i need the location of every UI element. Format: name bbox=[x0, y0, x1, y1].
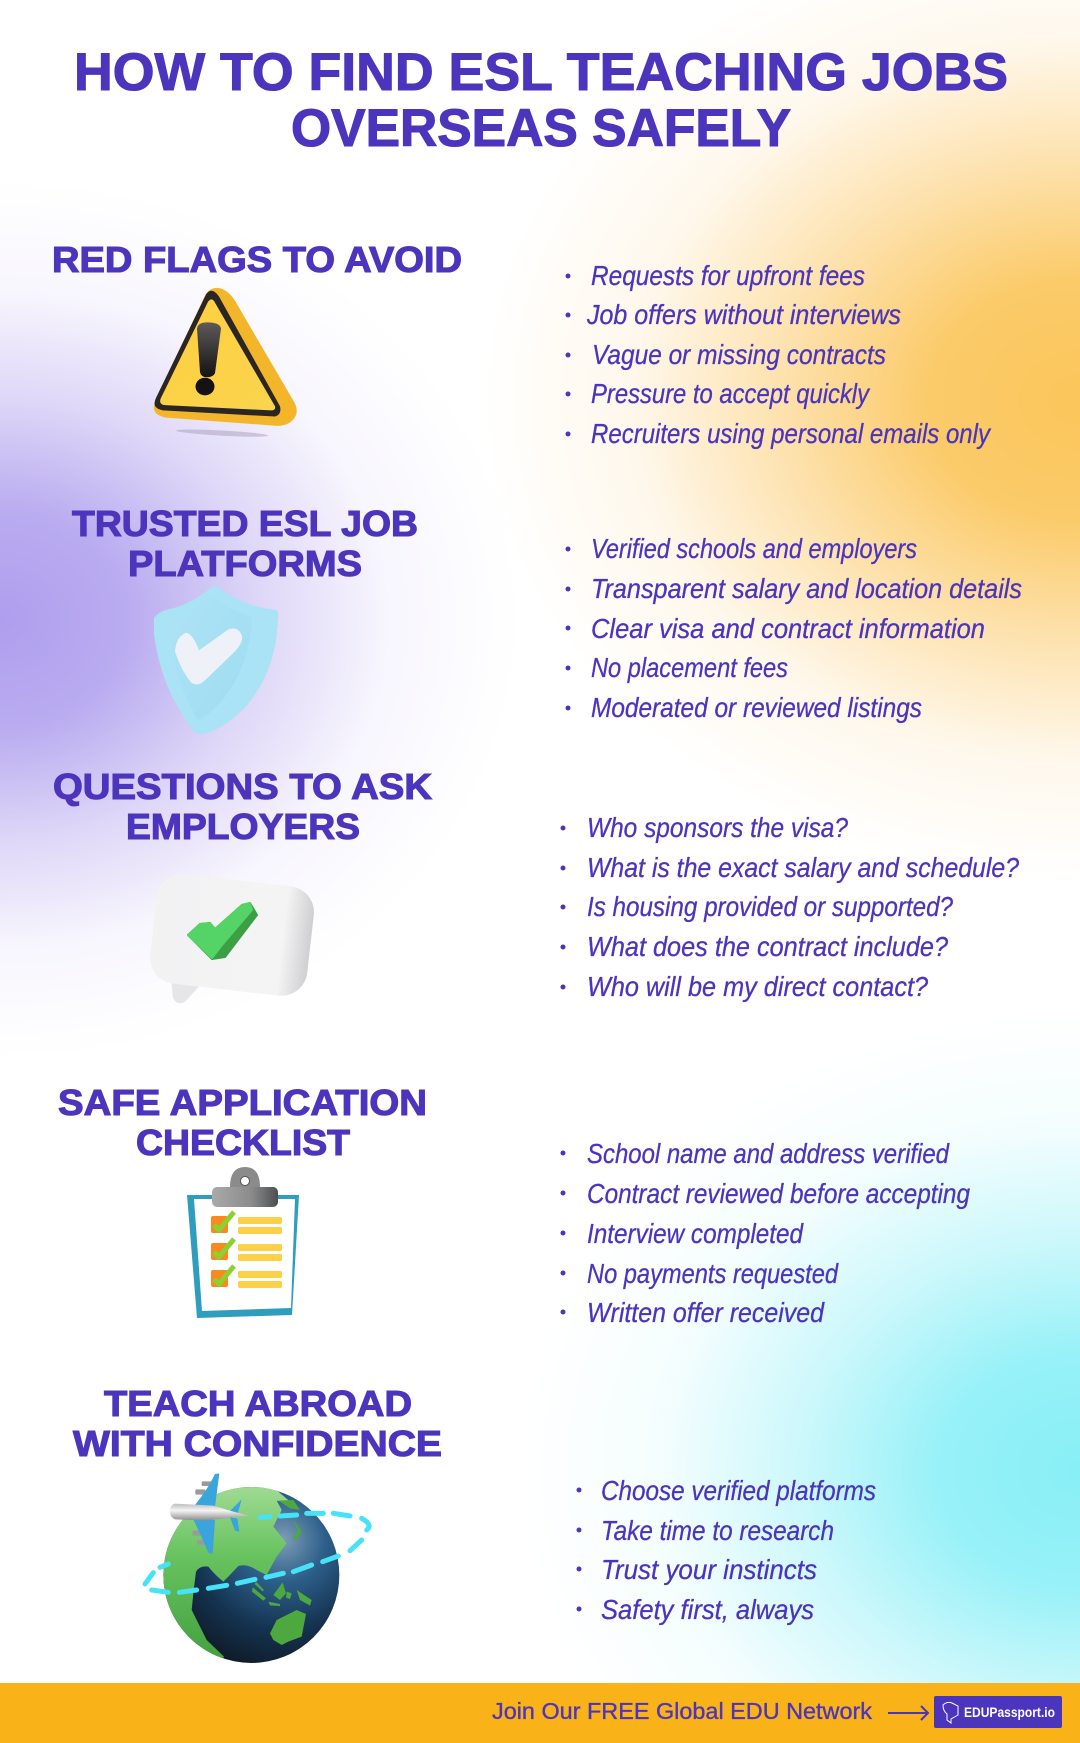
list: questions bbox=[560, 812, 1019, 1002]
list: trusted platforms: No placement fees bbox=[591, 652, 788, 683]
title bbox=[74, 43, 1008, 158]
list: red flags: Recruiters using personal emails only bbox=[591, 418, 992, 449]
logo badge bbox=[934, 1696, 1062, 1728]
orbit dashes bbox=[145, 1513, 369, 1592]
list: questions: What does the contract include? bbox=[587, 931, 948, 962]
icon: shield with check bbox=[154, 585, 278, 734]
list: questions: Who sponsors the visa? bbox=[587, 812, 848, 843]
list: questions: Who will be my direct contact? bbox=[587, 971, 928, 1002]
list: confidence: Safety first, always bbox=[601, 1594, 814, 1625]
list: red flags bbox=[566, 260, 992, 449]
footer banner bbox=[0, 1683, 1080, 1743]
list: confidence: Take time to research bbox=[601, 1515, 834, 1546]
list: checklist bbox=[560, 1138, 970, 1328]
list: confidence: Trust your instincts bbox=[601, 1554, 817, 1585]
list: checklist: No payments requested bbox=[587, 1258, 839, 1289]
heading: trusted platforms bbox=[72, 503, 418, 584]
call to action text: Join Our FREE Global EDU Network bbox=[492, 1698, 872, 1724]
list: checklist: Contract reviewed before accepting bbox=[587, 1178, 970, 1209]
heading: trusted platforms: PLATFORMS bbox=[128, 543, 362, 584]
list: confidence: Choose verified platforms bbox=[601, 1475, 876, 1506]
list: trusted platforms: Moderated or reviewed listings bbox=[591, 692, 922, 723]
list: questions: What is the exact salary and schedule? bbox=[587, 852, 1019, 883]
list: red flags: Requests for upfront fees bbox=[591, 260, 865, 291]
list: red flags: Pressure to accept quickly bbox=[591, 378, 871, 409]
list: checklist: Written offer received bbox=[587, 1297, 825, 1328]
clip bbox=[230, 1167, 260, 1187]
heading: checklist bbox=[58, 1082, 427, 1163]
heading: checklist: SAFE APPLICATION bbox=[58, 1082, 427, 1123]
list: trusted platforms: Verified schools and employers bbox=[591, 533, 917, 564]
list: trusted platforms bbox=[566, 533, 1022, 723]
icon: globe and plane bbox=[140, 1473, 369, 1673]
logo badge: EDUPassport.io bbox=[964, 1704, 1055, 1720]
heading: questions: QUESTIONS TO ASK bbox=[53, 766, 432, 807]
icon: warning triangle bbox=[154, 288, 297, 438]
list: questions: Is housing provided or supported? bbox=[587, 891, 953, 922]
arrow bbox=[888, 1706, 928, 1720]
icon: clipboard checklist bbox=[187, 1167, 299, 1318]
heading: confidence: TEACH ABROAD bbox=[104, 1383, 412, 1424]
heading: trusted platforms: TRUSTED ESL JOB bbox=[72, 503, 418, 544]
title: HOW TO FIND ESL TEACHING JOBS bbox=[74, 43, 1008, 102]
list: red flags: Vague or missing contracts bbox=[592, 339, 886, 370]
icon: speech bubble with check bbox=[147, 871, 317, 1003]
heading: confidence bbox=[73, 1383, 442, 1464]
list: red flags: Job offers without interviews bbox=[586, 299, 901, 330]
heading: questions: EMPLOYERS bbox=[126, 806, 360, 847]
list: checklist: School name and address verified bbox=[587, 1138, 950, 1169]
title: OVERSEAS SAFELY bbox=[291, 99, 791, 158]
heading: checklist: CHECKLIST bbox=[136, 1122, 350, 1163]
list: trusted platforms: Transparent salary and location details bbox=[591, 573, 1022, 604]
heading: questions bbox=[53, 766, 432, 847]
list: confidence bbox=[576, 1475, 876, 1625]
checklist rows bbox=[211, 1212, 282, 1234]
heading: red flags: RED FLAGS TO AVOID bbox=[52, 239, 462, 280]
exclamation mark bbox=[197, 322, 221, 377]
list: trusted platforms: Clear visa and contract information bbox=[591, 613, 985, 644]
plane bbox=[170, 1473, 250, 1554]
heading: confidence: WITH CONFIDENCE bbox=[73, 1423, 442, 1464]
list: checklist: Interview completed bbox=[587, 1218, 804, 1249]
